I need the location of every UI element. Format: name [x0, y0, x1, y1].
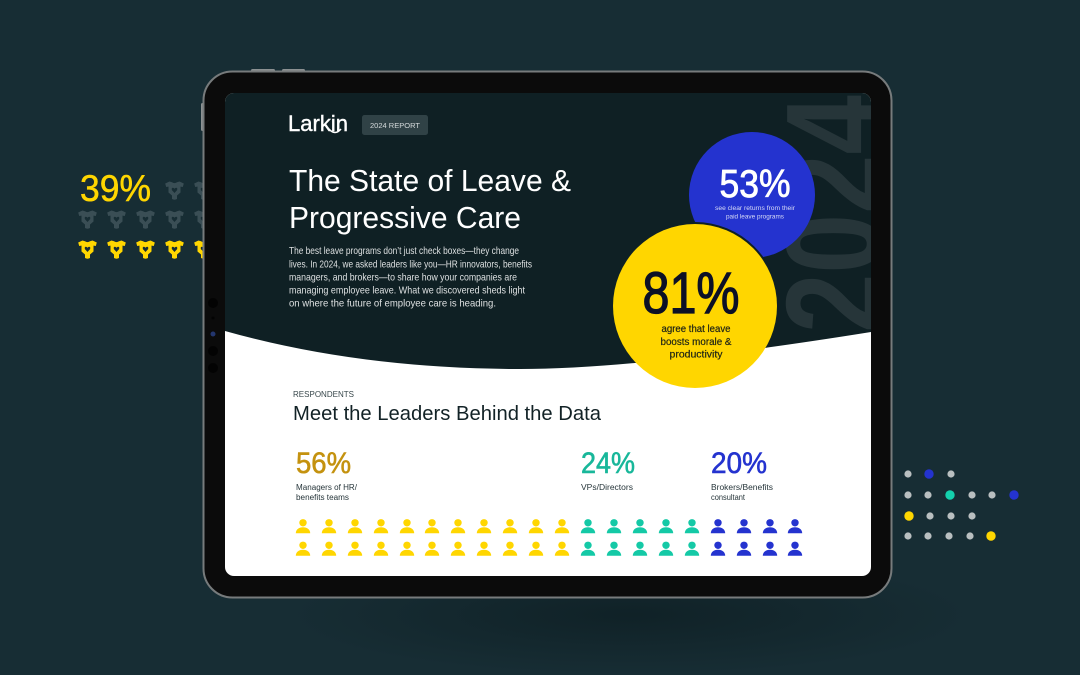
yellow stat circle: productivity — [670, 350, 722, 360]
badge 2024 report: 2024 REPORT — [370, 121, 420, 130]
stat: 56 percent managers: Managers of HR/ — [296, 483, 358, 492]
people pictogram: brokers — [711, 519, 802, 556]
yellow onesie icons — [78, 240, 213, 259]
dark hero panel — [225, 93, 871, 369]
stat: 56 percent managers: benefits teams — [296, 493, 349, 502]
blue stat text: 53% — [720, 163, 790, 206]
blue stat text — [715, 169, 795, 220]
muted onesie icons — [78, 182, 213, 229]
yellow circle dark ring — [634, 222, 768, 364]
tablet buttons — [201, 69, 305, 131]
intro paragraph: managing employee leave. What we discovered sheds light — [289, 284, 525, 296]
stat: 20 percent brokers: consultant — [711, 493, 746, 502]
blue circle backing — [689, 132, 815, 258]
title: The State of Leave & — [289, 163, 571, 198]
tablet shadow — [290, 555, 970, 675]
white page — [225, 93, 871, 576]
stat: 39 percent with onesie icons — [78, 168, 213, 259]
intro paragraph: The best leave programs don’t just check boxes—they change — [289, 245, 519, 257]
stat: 24 percent VPs — [581, 452, 634, 490]
section heading: Meet the Leaders Behind the Data — [293, 403, 602, 425]
yellow stat circle: 81% — [642, 261, 740, 326]
stat: 24 percent VPs: 24% — [581, 447, 635, 480]
intro paragraph: lives. In 2024, we asked leaders like you—HR innovators, benefits — [289, 258, 532, 270]
intro paragraph: on where the future of employee care is heading. — [289, 298, 496, 310]
section eyebrow: RESPONDENTS — [293, 389, 354, 399]
blue stat text: paid leave programs — [726, 214, 785, 220]
camera dots — [208, 298, 218, 373]
people pictogram: VPs — [581, 519, 699, 556]
yellow stat circle: agree that leave — [662, 324, 731, 335]
logo Larkin: Larkin — [288, 111, 348, 136]
tablet screen — [225, 93, 909, 576]
stat: 56 percent managers — [296, 452, 357, 500]
dot matrix decoration — [904, 469, 1019, 541]
intro paragraph — [289, 245, 532, 310]
tablet body — [204, 72, 892, 598]
stat: 56 percent managers: 56% — [296, 447, 351, 480]
tablet device — [201, 69, 909, 598]
title — [289, 163, 571, 235]
stat: 20 percent brokers: Brokers/Benefits — [711, 483, 773, 492]
stat: 24 percent VPs: VPs/Directors — [581, 483, 633, 492]
watermark 2024: 2024 — [758, 95, 909, 333]
intro paragraph: managers, and brokers—to share how your companies are — [289, 272, 517, 284]
stat: 20 percent brokers: 20% — [711, 447, 767, 480]
people pictogram: managers — [296, 519, 569, 556]
stat: 20 percent brokers — [711, 452, 773, 500]
blue stat text: see clear returns from their — [715, 205, 796, 212]
title: Progressive Care — [289, 200, 521, 235]
yellow stat circle: boosts morale & — [660, 337, 732, 348]
stat value 39%: 39% — [80, 168, 151, 209]
yellow stat circle — [613, 224, 777, 388]
badge 2024 report — [362, 115, 428, 135]
